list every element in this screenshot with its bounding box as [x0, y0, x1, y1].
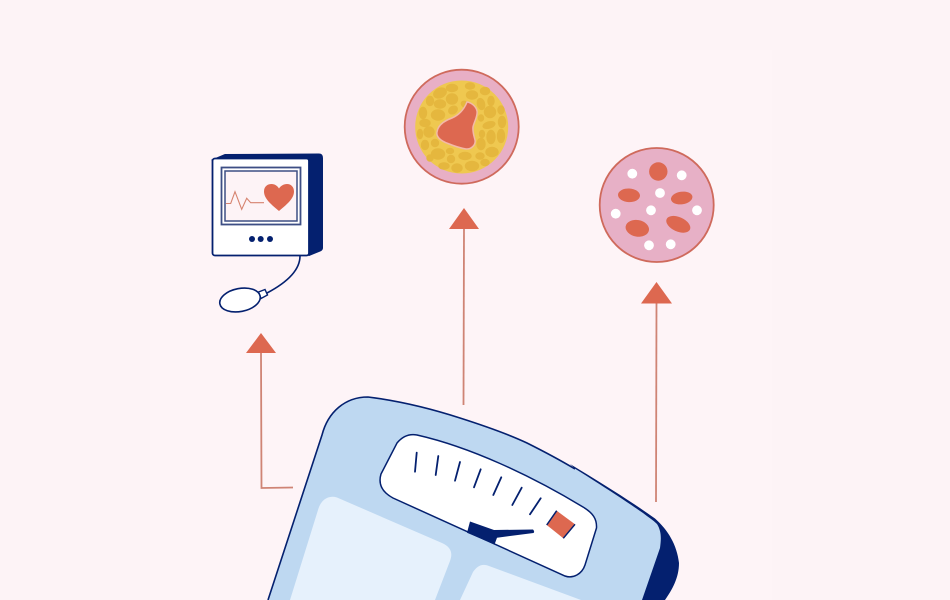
monitor side panel — [212, 154, 322, 256]
connector — [258, 290, 268, 298]
icon: weighing scale — [268, 397, 679, 600]
dial tick marks — [415, 453, 541, 514]
dial needle — [467, 522, 534, 544]
left foot pad — [290, 497, 451, 600]
arrow: scale to monitor — [246, 333, 293, 488]
target marker — [547, 511, 575, 538]
icon: clogged artery — [405, 70, 519, 184]
monitor front — [212, 158, 309, 256]
scale shadow edge — [570, 464, 679, 600]
icon: blood vessel cross-section — [600, 148, 714, 262]
fatty plaque — [415, 80, 508, 174]
inflation bulb — [218, 285, 262, 315]
right foot pad — [460, 565, 581, 600]
ECG trace — [226, 192, 264, 209]
arrow: scale to artery — [449, 208, 479, 405]
scale body — [268, 397, 661, 600]
vessel disc — [600, 148, 714, 262]
arrow: scale to vessel — [641, 282, 672, 502]
icon: heart — [264, 184, 294, 211]
monitor buttons — [249, 236, 273, 242]
fat cells — [418, 84, 505, 172]
artery wall — [405, 70, 519, 184]
tube — [267, 256, 300, 293]
icon: blood pressure monitor — [212, 154, 322, 315]
red blood cells — [618, 162, 693, 239]
monitor screen — [222, 168, 300, 224]
narrowed blood channel — [437, 102, 477, 149]
dial window — [380, 435, 597, 577]
white blood cells — [611, 169, 702, 250]
